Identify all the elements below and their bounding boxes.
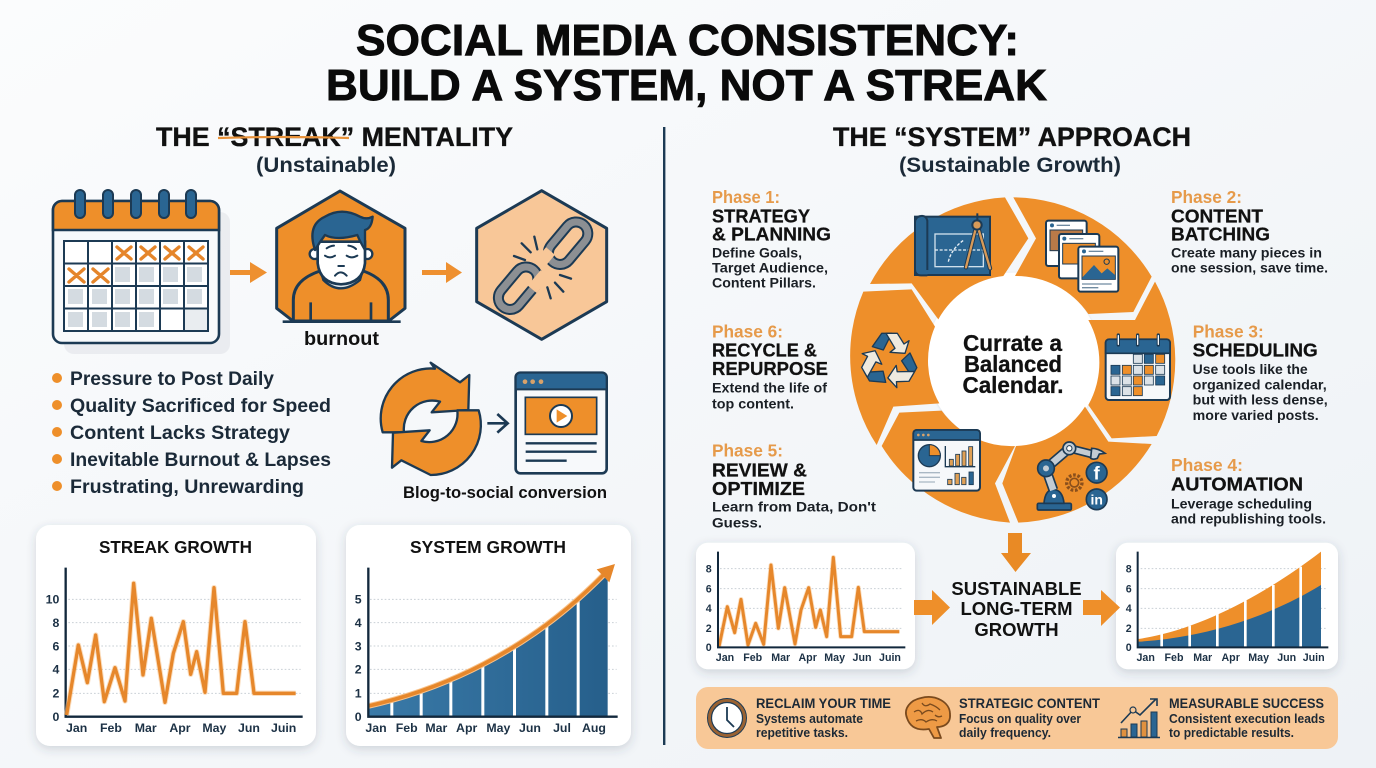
center text: balanced calendar: Balanced <box>964 351 1062 377</box>
chart card: system growth: May <box>486 721 510 735</box>
benefits band <box>696 687 1338 749</box>
chart card: system growth: Apr <box>456 721 477 735</box>
icon: scheduling calendar <box>1106 335 1170 400</box>
phase 1 text: Define Goals, <box>712 245 802 260</box>
center text: balanced calendar <box>962 330 1064 398</box>
text: strategic content: Focus on quality over <box>959 712 1081 726</box>
icon: batched content cards <box>1046 221 1118 292</box>
heading: system approach: (Sustainable Growth) <box>899 154 1121 177</box>
text: reclaim your time: Systems automate <box>756 712 863 726</box>
heading: system approach <box>833 122 1191 177</box>
phase 5 text: Phase 5: <box>712 441 783 461</box>
chart card: system growth: 4 <box>355 616 362 630</box>
chart card: system growth: Jun <box>519 721 541 735</box>
mini chart: system: Juin <box>1303 652 1325 664</box>
phase 3 text: Use tools like the <box>1193 362 1308 377</box>
mini chart: streak: Feb <box>743 652 763 664</box>
chart card: streak growth: Jun <box>238 721 260 735</box>
text: strategic content <box>959 696 1101 740</box>
icon: burnout person <box>277 191 405 322</box>
icon: growth chart <box>1118 699 1160 738</box>
phase 4 text: and republishing tools. <box>1171 511 1326 526</box>
text: reclaim your time: repetitive tasks. <box>756 726 848 740</box>
label: sustainable long-term growth: GROWTH <box>974 619 1059 640</box>
mini chart: system: May <box>1248 652 1269 664</box>
phase 6 text: REPURPOSE <box>712 358 828 379</box>
text: measurable success: to predictable results. <box>1169 726 1294 740</box>
heading: streak mentality: THE “STREAK” MENTALITY <box>156 122 513 152</box>
arrow: growth label to system chart <box>1083 590 1120 626</box>
chart card: streak growth: STREAK GROWTH <box>99 537 252 557</box>
chart card: streak growth: Apr <box>169 721 191 735</box>
icon: blueprint and compass <box>915 213 990 275</box>
phase 1 text: Content Pillars. <box>712 275 816 290</box>
phase 3 text <box>1193 321 1328 423</box>
list: streak problems: Inevitable Burnout & Lapses <box>70 449 331 471</box>
text: strategic content: daily frequency. <box>959 726 1051 740</box>
phase 6 text: RECYCLE & <box>712 340 817 361</box>
text: measurable success: MEASURABLE SUCCESS <box>1169 696 1324 711</box>
label: burnout: burnout <box>304 329 380 350</box>
text: measurable success: Consistent execution leads <box>1169 712 1325 726</box>
icon: analytics window <box>913 430 980 491</box>
mini chart: system: 4 <box>1126 603 1132 615</box>
chart card: streak growth: Jan <box>66 721 87 735</box>
mini chart: streak: Jun <box>853 652 871 664</box>
text: measurable success <box>1169 696 1325 740</box>
chart card: system growth <box>346 525 631 746</box>
chart card: streak growth: May <box>202 721 226 735</box>
mini chart: streak: May <box>824 652 845 664</box>
phase 6 text: Extend the life of <box>712 381 828 396</box>
ring segments <box>850 197 1175 523</box>
label: sustainable long-term growth <box>951 578 1082 640</box>
mini chart: streak: Mar <box>771 652 790 664</box>
phase 1 text: STRATEGY <box>712 206 811 227</box>
icon: automation robot arm: f <box>1094 462 1101 483</box>
phase 3 text: SCHEDULING <box>1193 340 1318 361</box>
mini chart: system: Jun <box>1277 652 1296 664</box>
mini chart: system: Mar <box>1193 652 1212 664</box>
chart card: system growth: Jul <box>553 721 571 735</box>
arrow: burnout to broken chain <box>422 262 462 283</box>
icon: calendar with crossed days <box>53 190 230 354</box>
phase 2 text: CONTENT <box>1171 206 1264 227</box>
chart card: system growth: SYSTEM GROWTH <box>410 537 566 557</box>
chart card: system growth: Mar <box>425 721 447 735</box>
chart card: streak growth: Juin <box>271 721 296 735</box>
chart card: system growth: 3 <box>355 639 362 653</box>
phase 2 text: Create many pieces in <box>1171 245 1322 260</box>
arrow: streak chart to growth label <box>914 590 950 625</box>
phase 3 text: but with less dense, <box>1193 393 1328 408</box>
phase 1 text: & PLANNING <box>712 224 831 245</box>
list: streak problems: Frustrating, Unrewarding <box>70 476 304 498</box>
mini chart: streak: 2 <box>706 623 712 635</box>
phase 2 text: Phase 2: <box>1171 187 1242 207</box>
cycle diagram: six phases <box>850 197 1175 523</box>
phase 4 text: Leverage scheduling <box>1171 496 1312 511</box>
icon: automation robot arm: in <box>1090 491 1103 507</box>
chart card: system growth: 5 <box>355 593 362 607</box>
phase 5 text: OPTIMIZE <box>712 478 805 499</box>
center text: balanced calendar: Currate a <box>963 330 1062 356</box>
mini chart: streak: Jan <box>716 652 734 664</box>
label: sustainable long-term growth: SUSTAINABLE <box>951 578 1082 599</box>
phase 3 text: organized calendar, <box>1193 377 1327 392</box>
title <box>326 16 1047 110</box>
icon: brain <box>906 697 950 738</box>
title: SOCIAL MEDIA CONSISTENCY: <box>356 16 1019 65</box>
chart card: streak growth: 2 <box>52 687 59 701</box>
list: streak problems: Pressure to Post Daily <box>70 368 274 390</box>
chart card: streak growth: Mar <box>135 721 157 735</box>
heading: system approach: THE “SYSTEM” APPROACH <box>833 122 1191 152</box>
chart card: streak growth: Feb <box>100 721 122 735</box>
mini chart: streak: 4 <box>706 603 712 615</box>
phase 5 text <box>712 441 877 530</box>
chart card: streak growth: 10 <box>46 593 59 607</box>
heading: streak mentality: (Unstainable) <box>256 154 396 177</box>
arrow: calendar to burnout <box>230 262 267 283</box>
icon: clock <box>708 698 746 738</box>
chart card: system growth: Jan <box>365 721 387 735</box>
phase 2 text: BATCHING <box>1171 224 1270 245</box>
mini chart: streak <box>696 543 915 669</box>
chart card: system growth: Aug <box>582 721 606 735</box>
text: strategic content: STRATEGIC CONTENT <box>959 696 1101 711</box>
chart card: streak growth: 8 <box>52 616 59 630</box>
label: sustainable long-term growth: LONG-TERM <box>960 598 1073 619</box>
text: reclaim your time: RECLAIM YOUR TIME <box>756 696 891 711</box>
phase 4 text <box>1171 455 1326 526</box>
phase 1 text: Phase 1: <box>712 187 780 207</box>
chart card: system growth: Feb <box>396 721 418 735</box>
chart card: streak growth <box>36 525 316 746</box>
chart card: streak growth: 4 <box>52 663 59 677</box>
mini chart: system: Feb <box>1165 652 1184 664</box>
mini chart: system: 2 <box>1126 623 1132 635</box>
mini chart: system: Apr <box>1221 652 1240 664</box>
mini chart: system: 8 <box>1126 563 1132 575</box>
mini chart: system <box>1116 543 1338 669</box>
mini chart: system: 0 <box>1126 642 1132 654</box>
phase 4 text: AUTOMATION <box>1171 474 1303 495</box>
phase 6 text: top content. <box>712 396 794 411</box>
mini chart: streak: Juin <box>879 652 901 664</box>
phase 3 text: Phase 3: <box>1193 321 1264 341</box>
icon: blog-to-social conversion <box>381 363 607 475</box>
chart card: system growth: 0 <box>355 710 362 724</box>
phase 1 text <box>712 187 831 290</box>
icon: automation robot arm <box>1037 442 1107 510</box>
mini chart: streak: 6 <box>706 583 712 595</box>
chart card: streak growth: 6 <box>52 639 59 653</box>
label: blog-to-social conversion: Blog-to-social conversion <box>403 484 607 502</box>
mini chart: streak: Apr <box>798 652 817 664</box>
center text: balanced calendar: Calendar. <box>962 372 1064 398</box>
chart card: system growth: 1 <box>355 687 362 701</box>
list: streak problems: Content Lacks Strategy <box>70 422 290 444</box>
phase 4 text: Phase 4: <box>1171 455 1243 475</box>
icon: recycle arrows <box>856 333 922 391</box>
phase 6 text: Phase 6: <box>712 321 783 341</box>
phase 6 text <box>712 321 828 411</box>
phase 5 text: REVIEW & <box>712 460 807 481</box>
heading: streak mentality <box>156 122 513 177</box>
phase 1 text: Target Audience, <box>712 261 828 276</box>
icon: broken chain hexagon <box>477 191 607 339</box>
mini chart: streak: 0 <box>706 642 712 654</box>
list: streak problems: Quality Sacrificed for Speed <box>70 395 331 417</box>
mini chart: streak: 8 <box>706 563 712 575</box>
chart card: streak growth: 0 <box>52 710 59 724</box>
text: reclaim your time <box>756 696 891 740</box>
phase 5 text: Guess. <box>712 515 762 530</box>
divider line <box>663 127 665 745</box>
chart card: system growth: 2 <box>355 663 362 677</box>
phase 3 text: more varied posts. <box>1193 408 1319 423</box>
mini chart: system: 6 <box>1126 583 1132 595</box>
title: BUILD A SYSTEM, NOT A STREAK <box>326 61 1047 110</box>
phase 2 text <box>1171 187 1328 276</box>
phase 2 text: one session, save time. <box>1171 261 1328 276</box>
arrow: down to sustainable growth <box>1001 533 1031 572</box>
mini chart: system: Jan <box>1136 652 1155 664</box>
phase 5 text: Learn from Data, Don't <box>712 500 877 515</box>
list: streak problems <box>52 368 331 498</box>
